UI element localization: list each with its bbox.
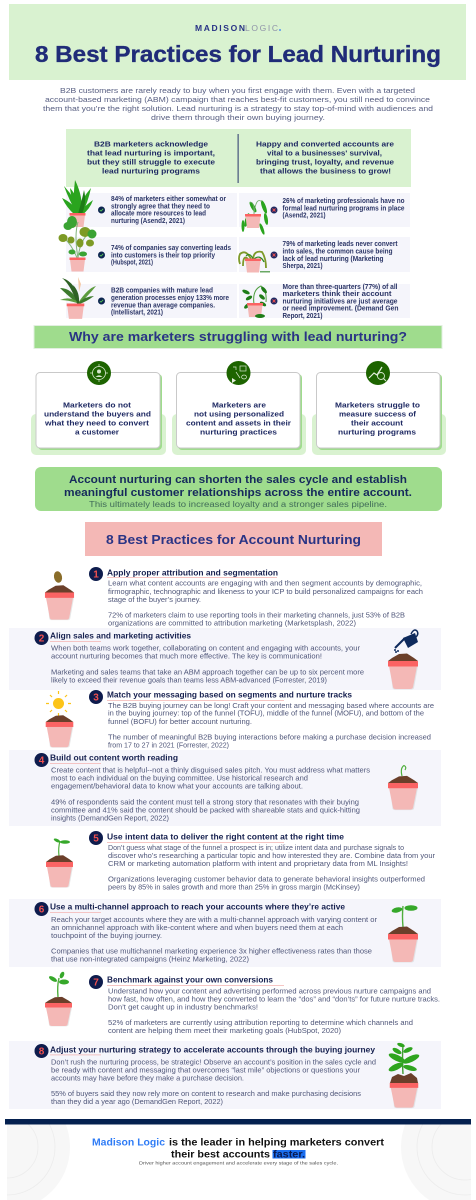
icon: round-leaf plant: [58, 216, 96, 272]
practice 6: 6: [39, 904, 45, 916]
footer headline: their best accounts: [171, 1150, 270, 1161]
practice 1: 72% of marketers claim to use reporting tools in their marketing channels, just 53% of B2B: [108, 610, 405, 619]
practice 2: likely to exceed their revenue goals than teams less ABM-advanced (Forrester, 2019): [51, 675, 327, 684]
icon: target person: [87, 361, 111, 385]
stat: 74% of companies: into customers is their top priority: [111, 252, 215, 259]
practice 1: Learn what content accounts are engaging with and then segment accounts by demographic,: [108, 579, 422, 588]
stat: 84% of marketers: nurturing (Asend2, 2021): [111, 218, 185, 225]
stat: 26% of professionals: [270, 198, 405, 220]
panel: reason 3: Marketers struggle to: [335, 400, 421, 410]
footer: [5, 1119, 471, 1196]
practice 3: The B2B buying journey can be long! Craft your content and messaging based where accounts are: [108, 701, 434, 710]
left statement: that lead nurturing is important,: [87, 149, 215, 158]
stat: 79% of leads: Sherpa, 2021): [282, 263, 322, 270]
practice 5: CRM or marketing automation platform with intent and proprietary data from ML Insights!: [108, 859, 408, 868]
practice 8: 8: [39, 1046, 45, 1058]
practice 6: touchpoint of the buying journey.: [51, 931, 162, 940]
stat: 133% more revenue: revenue than average companies.: [111, 302, 215, 309]
practice 7: 52% of marketers are currently using attribution reporting to determine which channels and: [108, 1018, 413, 1027]
practice 3: 3: [93, 692, 99, 704]
practice 8: Don’t rush the nurturing process, be strategic! Observe an account’s position in the sales cycle and: [51, 1057, 376, 1066]
footer headline: faster.: [273, 1150, 305, 1161]
panel: reason 2: nurturing practices: [200, 428, 277, 436]
practice 4: Build out content worth reading: [50, 754, 178, 763]
practice 8: accounts may have before they make a purchase decision.: [51, 1073, 244, 1082]
icon: seedling pot: [46, 838, 73, 888]
practice 8: 55% of buyers said they now rely more on content to research and make purchasing decisions: [51, 1089, 361, 1098]
panel: reason 1: what they need to convert: [44, 418, 150, 428]
footer subline: Driver higher account engagement and accelerate every stage of the sales cycle.: [139, 1161, 338, 1167]
practice 3: funnel (BOFU) for better account nurturing.: [108, 717, 252, 726]
panel: reason 2: not using personalized: [194, 410, 284, 418]
stat: 133% more revenue: (Intellistart, 2021): [111, 310, 163, 317]
practice 5: Don’t guess what stage of the funnel a prospect is in; utilize intent data and purchase signals to: [108, 843, 404, 852]
panel: reason 1: understand the buyers and: [44, 410, 151, 418]
intro text: B2B customers are rarely ready to buy when you first engage with them. Even with a targeted: [60, 86, 415, 95]
stat: 77% of marketers: or need improvement. (Demand Gen: [282, 306, 398, 313]
practice 1: [45, 567, 423, 627]
stat: 133% more revenue: B2B companies with mature lead: [111, 288, 213, 294]
stat: 84% of marketers: [98, 196, 226, 225]
stat: 74% of companies: [98, 245, 231, 267]
icon: watering can and pot: [388, 630, 418, 690]
icon: seed in pot: [45, 570, 74, 620]
icon: wilted plant: [239, 252, 270, 272]
panel: two key statements: [66, 129, 411, 187]
practice 4: engagement/behavioral data to know what your accounts are talking about.: [51, 782, 303, 791]
practice 6: Reach your target accounts where they are with a multi-channel approach with varying content or: [51, 915, 378, 924]
practice 5: [46, 831, 436, 892]
left statement: lead nurturing programs: [102, 167, 200, 176]
stat: 84% of marketers: allocate more resources to lead: [111, 211, 206, 218]
practice 5: Organizations leveraging customer behavior data to generate behavioral insights outperformed: [108, 875, 425, 884]
logo: [195, 23, 281, 33]
icon: drooping plant: [242, 200, 269, 235]
practice 4: 49% of respondents said the content must tell a strong story that resonates with their buying: [51, 797, 359, 806]
intro text: account-based marketing (ABM) campaign that reaches best-fit customers, you still need to convince: [45, 95, 430, 104]
panel: reason 3: [312, 361, 446, 455]
left statement: but they still struggle to execute: [87, 158, 215, 167]
icon: chart magnifier: [366, 361, 390, 385]
practice 2: When both teams work together, collaborating on content and engaging with accounts, your: [51, 644, 361, 653]
stat: 26% of professionals: formal lead nurturing programs in place: [282, 205, 405, 212]
practice 2: [9, 628, 441, 690]
practice 1: stage of the buyer’s journey.: [108, 595, 201, 604]
heading: 8 best practices for account nurturing: [85, 522, 382, 556]
stat: 133% more revenue: [98, 288, 229, 317]
right statement: vital to a businesses' survival,: [267, 149, 382, 158]
stat: 79% of leads: 79% of marketing leads never convert: [282, 241, 398, 248]
practice 3: [46, 690, 434, 750]
practice 7: 7: [93, 978, 99, 988]
stat: 79% of leads: [270, 241, 398, 270]
left statement: B2B marketers acknowledge: [94, 140, 208, 149]
panel: statistics grid: [66, 193, 410, 320]
icon: taller seedling pot: [388, 905, 418, 962]
right statement: Happy and converted accounts are: [256, 140, 394, 149]
panel: reason 1: a customer: [75, 428, 119, 436]
icon: sun and pot: [46, 691, 73, 748]
practice 2: Align sales and marketing activities: [50, 632, 192, 641]
logo: LOGIC: [245, 23, 278, 33]
intro text: them that you’re the right solution. Lead nurturing is a strategy to stay top-of-mind with audiences and: [43, 104, 433, 113]
callout: account nurturing: meaningful customer relationships across the entire account.: [64, 487, 412, 499]
right statement: that allows the business to grow!: [260, 167, 391, 176]
practice 6: an omnichannel approach with like-content where and when buyers need them at each: [51, 923, 343, 932]
stat: 74% of companies: (Hubspot, 2021): [111, 260, 153, 267]
panel: reason 2: Marketers are: [212, 400, 266, 410]
callout: account nurturing: This ultimately leads to increased loyalty and a stronger sales pipeline.: [89, 500, 387, 509]
practice 4: most to each individual on the buying committee. Use historical research and: [51, 774, 308, 783]
practice 4: insights (DemandGen Report, 2022): [51, 813, 169, 822]
practice 1: organizations are committed to attribution marketing (Marketsplash, 2022): [108, 618, 356, 627]
practice 2: account nurturing becomes that much more effective. The key is communication!: [51, 652, 322, 661]
icon: spiky plant: [62, 180, 93, 227]
practice 8: [9, 1041, 441, 1109]
footer bar: [5, 1119, 471, 1124]
practice 7: content are helping them meet their marketing goals (HubSpot, 2020): [108, 1026, 341, 1035]
banner: why are marketers struggling: Why are marketers struggling with lead nurturing?: [69, 329, 407, 344]
practice 8: than they did a year ago (DemandGen Report, 2022): [51, 1097, 223, 1106]
stat: 77% of marketers: Report, 2021): [282, 313, 322, 320]
practice 4: 4: [39, 756, 45, 766]
practice 4: committee and 41% said the content should be packed with shareable stats and quick-hitting: [51, 805, 360, 814]
panel: reason 1: Marketers do not: [63, 400, 132, 410]
practice 3: in the buying journey: top of the funnel (TOFU), middle of the funnel (MOFU), and bottom of the: [108, 709, 424, 718]
practice 7: Don’t get caught up in industry benchmarks!: [108, 1002, 258, 1011]
stat: 74% of companies: 74% of companies say converting leads: [111, 245, 231, 252]
callout: account nurturing: [35, 467, 442, 511]
footer headline: Madison Logic: [92, 1138, 165, 1149]
footer headline: [92, 1138, 385, 1161]
practice 2: 2: [39, 634, 45, 644]
icon: broad-leaf plant: [242, 286, 268, 318]
stat: 79% of leads: lack of lead nurturing (Marketing: [282, 256, 384, 263]
practice 3: The number of meaningful B2B buying interactions before making a purchase decision increased: [108, 733, 431, 742]
stat: 77% of marketers: More than three-quarters (77%) of all: [282, 284, 398, 291]
header panel: [9, 4, 466, 80]
icon: full plant pot: [387, 1042, 420, 1108]
left statement: [87, 140, 215, 176]
stat: 26% of professionals: (Asend2, 2021): [282, 212, 326, 220]
stat: 77% of marketers: marketers think their account: [282, 291, 392, 298]
callout: account nurturing: Account nurturing can shorten the sales cycle and establish: [69, 474, 407, 486]
stat: 77% of marketers: [270, 284, 398, 320]
intro text: [43, 86, 433, 122]
icon: leafy seedling pot: [45, 971, 72, 1026]
logo: MADISON: [195, 23, 245, 33]
footer headline: is the leader in helping marketers convert: [169, 1138, 385, 1149]
panel: reason 1: [31, 361, 166, 455]
practice 7: [45, 971, 440, 1035]
stat: 133% more revenue: generation processes enjoy 133% more: [111, 295, 229, 302]
right statement: bringing trust, loyalty, and revenue: [256, 158, 394, 167]
banner: why are marketers struggling: [34, 326, 442, 348]
icon: content assets: [226, 361, 250, 385]
practice 8: be ready with content and messaging that overcomes “last mile” objections or questions your: [51, 1065, 361, 1074]
panel: reason 2: content and assets in their: [186, 418, 291, 428]
practice 8: Adjust your nurturing strategy to accelerate accounts through the buying journey: [50, 1046, 376, 1055]
practice 4: [9, 750, 441, 826]
panel: reason 2: [172, 361, 306, 455]
practice 3: from 17 to 27 in 2021 (Forrester, 2022): [108, 741, 229, 750]
practice 1: 1: [93, 570, 99, 580]
intro text: drive them through their own buying journey.: [151, 113, 325, 122]
icon: sprouting pot: [388, 766, 418, 810]
panel: reason 3: measure success of: [339, 410, 417, 418]
right statement: [256, 140, 394, 176]
icon: peace lily: [60, 277, 96, 319]
stat: 84% of marketers: 84% of marketers either somewhat or: [111, 196, 226, 203]
practice 7: how fast, how often, and how they converted to learn the “dos” and “don’ts” for future nurture tracks.: [108, 994, 440, 1003]
practice 5: Use intent data to deliver the right content at the right time: [107, 833, 345, 842]
stat: 26% of professionals: 26% of marketing professionals have no: [282, 198, 404, 205]
panel: reason 3: nurturing programs: [338, 428, 416, 436]
panel: reason 3: their account: [351, 418, 404, 428]
practice 6: Companies that use multichannel marketing experience 3x higher effectiveness rates than those: [51, 947, 372, 956]
stat: 84% of marketers: strongly agree that they need to: [111, 203, 210, 210]
footer background circles: [7, 1124, 471, 1196]
stat: 79% of leads: into sales, the common cause being: [282, 248, 392, 256]
stat: 77% of marketers: nurturing initiatives are just average: [282, 298, 398, 305]
practice 7: Understand how your content and advertising performed across previous nurture campaigns and: [108, 986, 431, 995]
practice 7: Benchmark against your own conversions: [107, 976, 274, 985]
title: 8 Best Practices for Lead Nurturing: [35, 41, 441, 67]
practice 2: Marketing and sales teams that take an ABM approach together can be up to six percent more: [51, 667, 364, 676]
practice 1: Apply proper attribution and segmentation: [107, 568, 278, 577]
practice 6: [9, 899, 441, 967]
practice 6: Use a multi-channel approach to reach your accounts where they’re active: [50, 903, 346, 912]
practice 5: peers by 85% in sales growth and more than 25% in gross margin (McKinsey): [108, 883, 360, 892]
practice 1: firmographic, technographic and likeness to your ICP to build personalized campaigns for each: [108, 587, 423, 596]
practice 4: Create content that is helpful--not a thinly disguised sales pitch. You must address what matters: [51, 766, 370, 775]
practice 5: discover who’s researching a particular topic and how interested they are. Combine data from your: [108, 851, 436, 860]
practice 5: 5: [93, 834, 99, 844]
heading: 8 best practices for account nurturing: 8 Best Practices for Account Nurturing: [106, 533, 361, 547]
practice 3: Match your messaging based on segments and nurture tracks: [107, 691, 353, 700]
practice 6: that use non-integrated campaigns (Heinz Marketing, 2022): [51, 955, 249, 964]
